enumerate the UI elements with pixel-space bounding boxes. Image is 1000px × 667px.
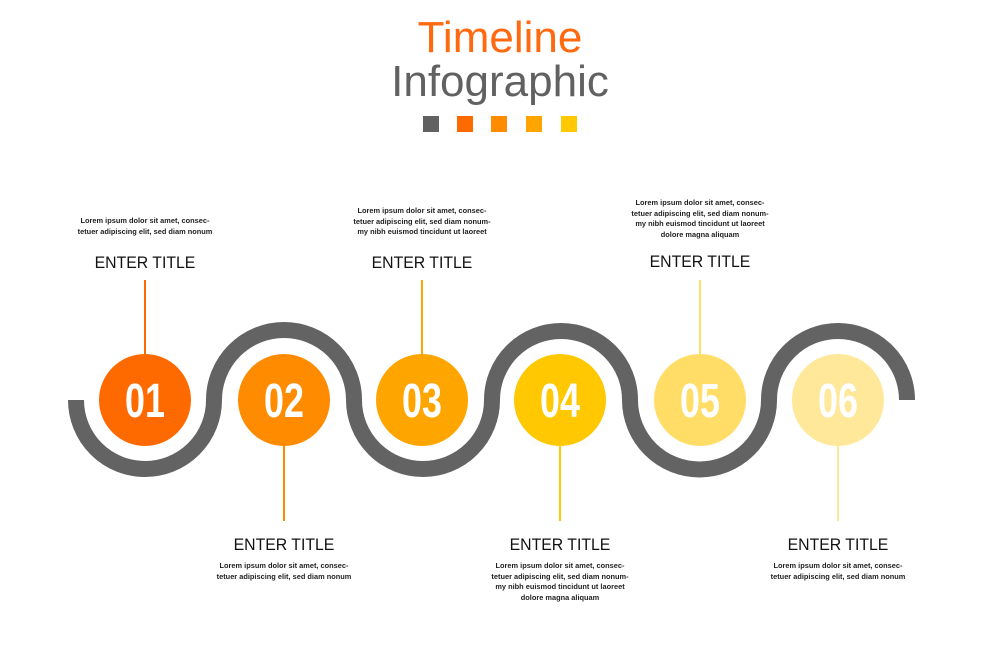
text: ENTER TITLE [510,535,610,554]
step 4 text [491,535,629,602]
text: tetuer adipiscing elit, sed diam nonum [78,226,212,236]
connector lines [145,280,838,521]
text: ENTER TITLE [234,535,334,554]
title: Timeline [418,13,582,62]
step 6 text: Lorem ipsum dolor sit amet, consec- [774,561,902,570]
step circles: 04 [540,374,580,428]
text: dolore magna aliquam [521,592,599,602]
step circles: 02 [264,374,304,428]
step circles: 03 [402,374,442,428]
step circles [99,354,884,446]
text: tetuer adipiscing elit, sed diam nonum [771,572,905,580]
text: tetuer adipiscing elit, sed diam nonum- [491,572,629,580]
step circles: 06 [818,374,858,428]
step 2 text [216,535,351,580]
step 1 text: Lorem ipsum dolor sit amet, consec- [81,216,209,225]
text: ENTER TITLE [372,252,472,272]
step 4 text: my nibh euismod tincidunt ut laoreet [495,582,625,591]
text: tetuer adipiscing elit, sed diam nonum [217,572,351,580]
step 5 text: Lorem ipsum dolor sit amet, consec- [636,198,764,207]
text: tetuer adipiscing elit, sed diam nonum- [631,208,769,218]
title: Infographic [391,57,609,106]
text: tetuer adipiscing elit, sed diam nonum- [353,216,491,226]
step 6 text [770,535,905,580]
step 3 text: my nibh euismod tincidunt ut laoreet [357,227,487,236]
wave path [76,330,907,470]
step circles: 05 [680,374,720,428]
step 5 text: my nibh euismod tincidunt ut laoreet [635,219,765,228]
step circles: 01 [125,374,165,428]
text: ENTER TITLE [788,535,888,554]
title [391,13,609,106]
text: ENTER TITLE [95,253,195,272]
step 3 text: Lorem ipsum dolor sit amet, consec- [358,206,486,215]
step 3 text [353,206,491,272]
step 4 text: Lorem ipsum dolor sit amet, consec- [496,561,624,570]
text: dolore magna aliquam [661,230,739,238]
step 1 text [78,216,212,272]
step 2 text: Lorem ipsum dolor sit amet, consec- [220,561,348,570]
squares legend [423,116,577,132]
text: ENTER TITLE [650,252,750,271]
step 5 text [631,198,769,271]
